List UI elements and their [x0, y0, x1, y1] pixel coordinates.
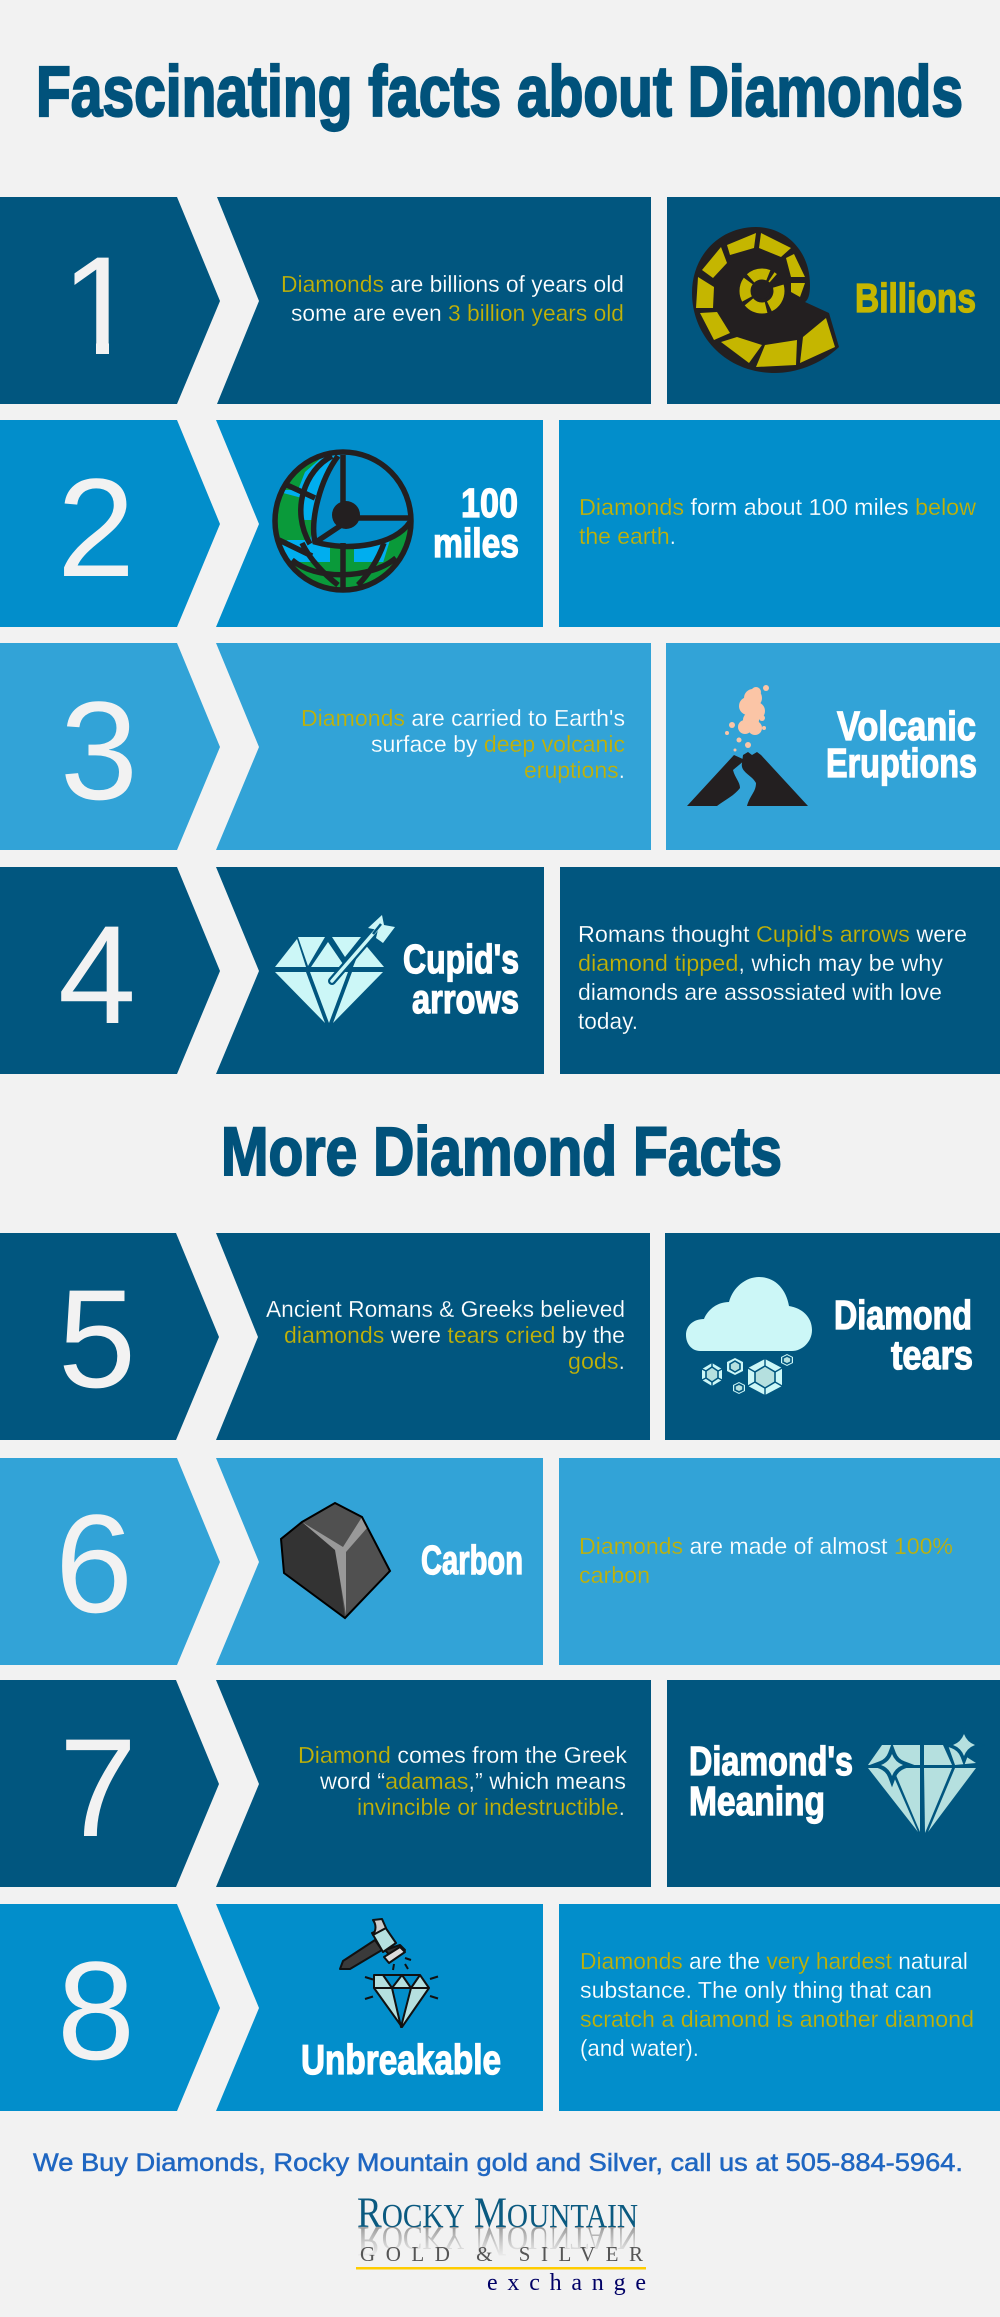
- chevron with number 3: [0, 643, 220, 850]
- chevron with number 3: 3: [60, 672, 138, 829]
- chevron with number 5: 5: [58, 1260, 136, 1417]
- text panel: scratch a diamond is another diamond: [580, 2006, 974, 2032]
- text panel: Diamonds are billions of years old: [281, 271, 624, 297]
- label: Diamond's Meaning: Diamond's: [689, 1738, 853, 1784]
- label: Billions: Billions: [855, 275, 976, 321]
- chevron with number 7: [0, 1680, 219, 1887]
- text panel: [216, 643, 651, 850]
- text panel: [217, 197, 651, 404]
- label: Carbon: Carbon: [421, 1537, 523, 1583]
- panel: fact 7: [0, 1680, 1000, 1887]
- label: Diamond's Meaning: [689, 1738, 853, 1824]
- text panel: (and water).: [580, 2035, 699, 2061]
- chevron with number 6: 6: [55, 1485, 133, 1642]
- text panel: diamonds are assossiated with love: [578, 979, 942, 1005]
- text panel: eruptions.: [524, 757, 625, 783]
- panel: fact 3: [0, 643, 1000, 850]
- text panel: gods.: [568, 1348, 625, 1374]
- icon panel: diamond with arrow and Cupid's arrows: [216, 867, 544, 1074]
- label: Cupid's arrows: Cupid's: [403, 936, 519, 982]
- icon: diamond with arrow: [275, 915, 395, 1023]
- icon panel: hammer and Unbreakable: [216, 1904, 543, 2111]
- chevron with number 4: 4: [58, 896, 136, 1053]
- text panel: [216, 1680, 651, 1887]
- text panel: Ancient Romans & Greeks believed: [266, 1296, 625, 1322]
- panel: fact 4: [0, 867, 1000, 1074]
- icon: sparkling diamond: [868, 1734, 976, 1833]
- text panel: today.: [578, 1008, 638, 1034]
- text panel: Diamonds are the very hardest natural: [580, 1948, 968, 1974]
- icon panel: volcano and Volcanic Eruptions: [666, 643, 1000, 850]
- text panel: substance. The only thing that can: [580, 1977, 932, 2003]
- logo: Rocky Mountain Gold & Silver Exchange: ROCKY MOUNTAIN: [357, 2190, 638, 2237]
- chevron with number 6: [0, 1458, 220, 1665]
- icon panel: cloud and Diamond tears: [665, 1233, 1000, 1440]
- icon: cloud with diamonds: [686, 1277, 812, 1395]
- call to action: We Buy Diamonds, Rocky Mountain gold and Silver, call us at 505-884-5964.: [33, 2149, 963, 2177]
- logo: Rocky Mountain Gold & Silver Exchange: exchange: [487, 2270, 646, 2296]
- icon panel: earth cross-section and 100 miles: [216, 420, 543, 627]
- label: Diamond tears: tears: [891, 1332, 973, 1378]
- text panel: Diamond comes from the Greek: [298, 1742, 627, 1768]
- chevron with number 2: 2: [57, 449, 135, 606]
- text panel: carbon: [579, 1562, 650, 1588]
- label: Volcanic Eruptions: [826, 703, 977, 786]
- panel: fact 2: [0, 420, 1000, 627]
- chevron with number 4: [0, 867, 220, 1074]
- text panel: Diamonds are made of almost 100%: [579, 1533, 953, 1559]
- text panel: surface by deep volcanic: [371, 731, 625, 757]
- label: Cupid's arrows: [403, 936, 519, 1022]
- icon: earth cross-section: [272, 452, 415, 594]
- panel: fact 8: [0, 1904, 1000, 2111]
- icon panel: Diamond's Meaning and diamond: [667, 1680, 1000, 1887]
- logo: Rocky Mountain Gold & Silver Exchange: ROCKY MOUNTAIN: [357, 2217, 638, 2264]
- text panel: Romans thought Cupid's arrows were: [578, 921, 967, 947]
- icon: volcano: [687, 685, 808, 806]
- text panel: [559, 420, 1000, 627]
- label: 100 miles: [433, 480, 519, 566]
- text panel: diamonds were tears cried by the: [284, 1322, 625, 1348]
- label: Cupid's arrows: arrows: [412, 976, 519, 1022]
- panel: fact 6: [0, 1458, 1000, 1665]
- text panel: Diamonds are carried to Earth's: [301, 705, 625, 731]
- label: Volcanic Eruptions: Volcanic: [837, 703, 976, 749]
- text panel: [560, 867, 1000, 1074]
- heading: More Diamond Facts: More Diamond Facts: [221, 1113, 782, 1190]
- chevron with number 7: 7: [59, 1709, 137, 1866]
- chevron with number 5: [0, 1233, 219, 1440]
- text panel: invincible or indestructible.: [357, 1794, 625, 1820]
- icon: ammonite fossil: [692, 227, 839, 373]
- chevron with number 8: [0, 1904, 220, 2111]
- text panel: Diamonds form about 100 miles below: [579, 494, 976, 520]
- text panel: some are even 3 billion years old: [291, 300, 624, 326]
- text panel: [559, 1904, 1000, 2111]
- panel: fact 1: [0, 197, 1000, 404]
- panel: fact 5: [0, 1233, 1000, 1440]
- text panel: diamond tipped, which may be why: [578, 950, 943, 976]
- chevron with number 1: 1: [61, 227, 139, 384]
- text panel: word “adamas,” which means: [319, 1768, 626, 1794]
- label: Diamond's Meaning: Meaning: [689, 1778, 825, 1824]
- logo: Rocky Mountain Gold & Silver Exchange: GOLD & SILVER: [360, 2242, 643, 2266]
- chevron with number 1: [0, 197, 220, 404]
- icon: carbon rock: [281, 1503, 390, 1618]
- label: Unbreakable: Unbreakable: [301, 2036, 501, 2083]
- logo: Rocky Mountain Gold & Silver Exchange: [356, 2190, 646, 2296]
- label: Diamond tears: [834, 1292, 973, 1378]
- icon: hammer and diamond: [340, 1919, 438, 2027]
- chevron with number 8: 8: [57, 1932, 135, 2089]
- label: 100 miles: 100: [461, 480, 518, 526]
- text panel: [216, 1233, 650, 1440]
- text panel: the earth.: [579, 523, 676, 549]
- label: 100 miles: miles: [433, 520, 519, 566]
- text panel: [559, 1458, 1000, 1665]
- icon panel: ammonite and Billions: [667, 197, 1000, 404]
- icon panel: coal and Carbon: [216, 1458, 543, 1665]
- chevron with number 2: [0, 420, 220, 627]
